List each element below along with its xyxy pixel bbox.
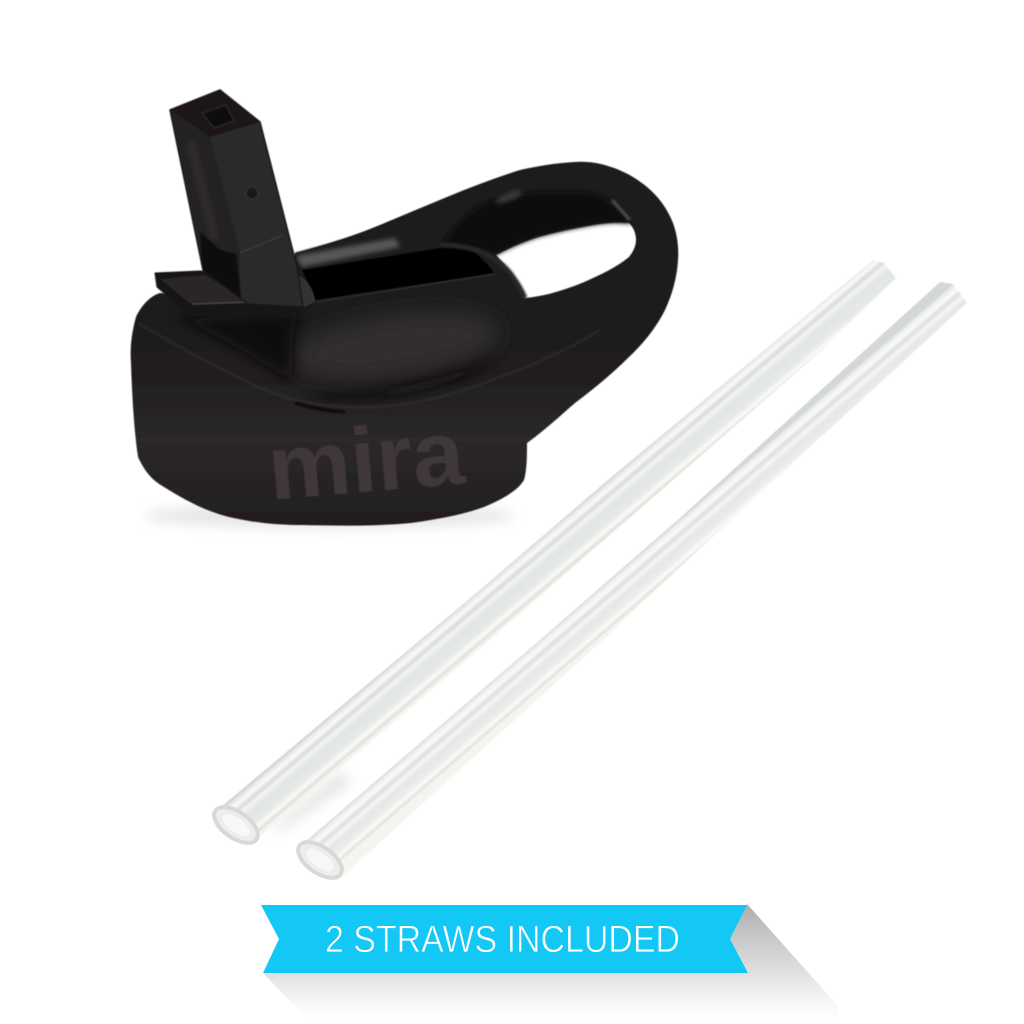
- recess upper lip: [295, 218, 440, 270]
- straw 2: [292, 282, 967, 885]
- product photo: bottle cap: [131, 90, 678, 528]
- dark shade under flap: [188, 312, 299, 379]
- flap highlight: [160, 275, 250, 303]
- spout shaft: [170, 90, 303, 307]
- banner long shadow: [263, 904, 838, 1024]
- spout rim bump: [298, 275, 315, 308]
- flap edge glint: [192, 302, 250, 304]
- cap body with carry handle: [131, 162, 678, 526]
- spout left face: [171, 111, 240, 297]
- spout top face: [170, 90, 260, 137]
- straw 2 opening: [292, 835, 348, 885]
- spout: [155, 90, 315, 316]
- straw 2 tube: [298, 282, 967, 876]
- banner ribbon: [261, 905, 748, 973]
- cap ground shadow: [145, 504, 515, 528]
- straw 1 opening rim: [208, 800, 264, 850]
- handle highlight: [495, 188, 523, 206]
- spout opening: [202, 105, 234, 128]
- straw 1 opening bore: [219, 810, 253, 840]
- ribbon banner: [261, 904, 838, 1024]
- straw 1 opening: [208, 800, 264, 850]
- recess light band: [296, 238, 400, 267]
- crease line across the body: [138, 323, 600, 407]
- embossed logo: mira: [264, 401, 469, 520]
- straw 1: [208, 260, 896, 850]
- handle inner shadow: [440, 191, 632, 255]
- spout recess: [302, 246, 494, 300]
- recess lower edge: [316, 274, 496, 302]
- straw 1 tube: [215, 260, 896, 838]
- spout lower dark fold: [200, 232, 241, 298]
- flap base: [155, 271, 315, 316]
- straw 2 opening bore: [303, 845, 337, 875]
- crease shadow: [295, 403, 345, 412]
- handle inner glint: [612, 200, 630, 220]
- top dome surface: [296, 310, 496, 378]
- banner label: 2 STRAWS INCLUDED: [325, 919, 680, 961]
- spout dimple: [246, 187, 258, 199]
- dark shade under dome: [324, 362, 484, 402]
- spout edges: [240, 235, 283, 253]
- recess rim: [440, 245, 525, 298]
- straw 1 shadow: [268, 772, 352, 832]
- cap shading: [188, 310, 496, 402]
- straw 2 opening rim: [292, 835, 348, 885]
- spout left face sheen: [190, 140, 215, 240]
